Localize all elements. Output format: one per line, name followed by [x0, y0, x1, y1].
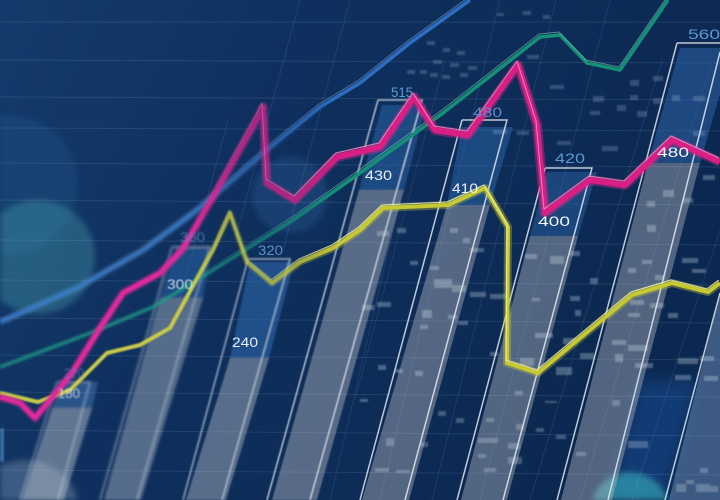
bokeh lights: [0, 115, 698, 500]
label: 430: 430: [365, 167, 392, 183]
bar 2 (300): [100, 247, 212, 500]
bar 3 (240): [183, 259, 294, 500]
label: 480 white: 480: [657, 144, 689, 160]
bar 8: [665, 293, 720, 500]
line: yellow: [0, 185, 720, 402]
line: blue: [0, 0, 470, 322]
line: green: [0, 0, 668, 367]
line: pink: [0, 61, 720, 418]
label: 515: 515: [391, 84, 413, 100]
label: 560: 560: [688, 26, 720, 42]
label: 410: 410: [452, 180, 478, 196]
label: 300: 300: [167, 276, 193, 292]
label: 400: 400: [538, 213, 570, 229]
data specks: [360, 11, 718, 492]
bar 6 (420): [457, 168, 597, 500]
label: 360: 360: [180, 229, 205, 245]
bar 4 (430): [267, 100, 426, 500]
bar 7 (560): [557, 43, 720, 500]
label: 420: 420: [555, 150, 585, 166]
label: 180: 180: [58, 385, 80, 401]
bar 5 (410): [360, 120, 513, 500]
bar 1 (180): [20, 382, 98, 500]
label: 320: 320: [258, 242, 283, 258]
value labels: [58, 26, 720, 401]
label: 220: 220: [64, 365, 84, 381]
label: 240: 240: [232, 334, 258, 350]
label: 480 blue: 480: [473, 104, 502, 120]
